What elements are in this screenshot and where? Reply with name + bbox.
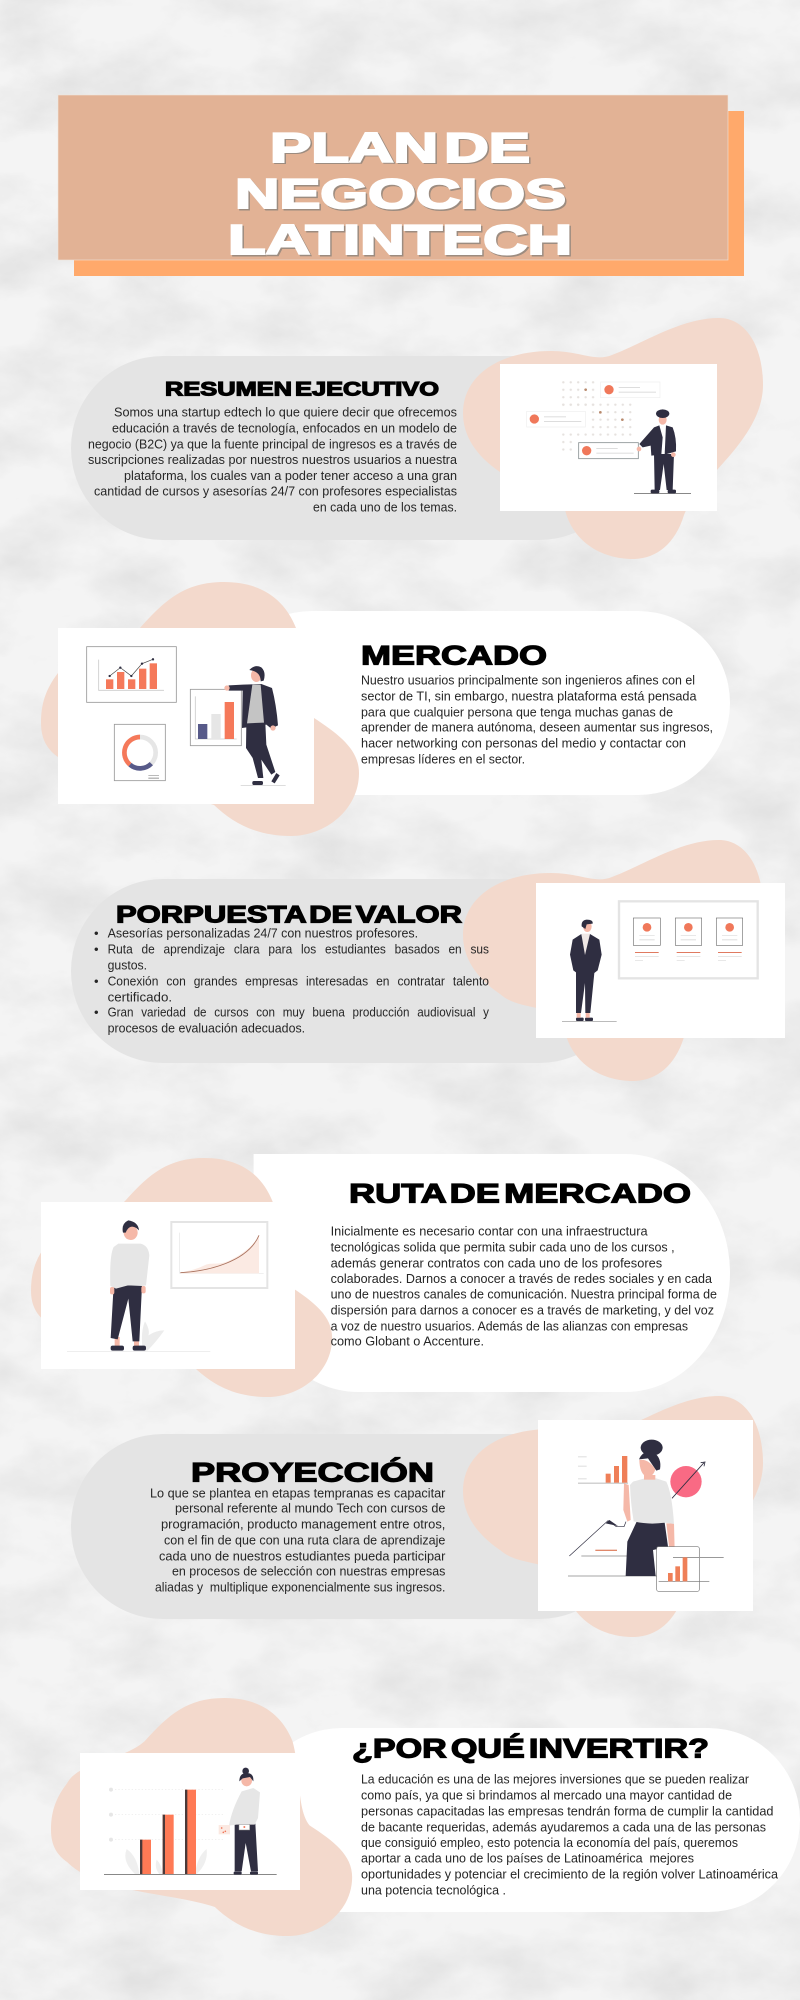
text: proyeccion body: con el fin de que con una ruta clara de aprendizaje <box>164 1532 445 1547</box>
text: proyeccion body <box>150 1486 446 1595</box>
title banner: NEGOCIOS <box>236 172 568 218</box>
text: mercado body: Nuestro usuarios principalmente son ingenieros afines con el <box>361 672 695 687</box>
text: ruta body: como Globant o Accenture. <box>331 1334 484 1349</box>
text: proyeccion body: aliadas y multiplique exponencialmente sus ingresos. <box>155 1580 445 1595</box>
title banner <box>58 95 744 276</box>
blob: mercado <box>41 582 359 836</box>
blob: invertir <box>51 1698 352 1936</box>
illustration: man with board <box>536 883 785 1038</box>
blob: ruta <box>31 1158 332 1397</box>
text: ruta body: uno de nuestros canales de comunicación. Nuestra principal forma de <box>331 1287 717 1302</box>
text: mercado body: para que cualquier persona que tenga muchas ganas de <box>361 705 673 720</box>
text: invertir body: La educación es una de las mejores inversiones que se pueden realizar <box>361 1772 750 1787</box>
text: resumen body: negocio (B2C) ya que la fuente principal de ingresos es a través de <box>88 436 457 451</box>
text: invertir body: como país, ya que si brindamos al mercado una mayor cantidad de <box>361 1788 732 1803</box>
text: resumen body: suscripciones realizadas por nuestros nuestros usuarios a nuestra <box>88 452 458 467</box>
illustration: woman with charts <box>538 1420 753 1611</box>
text: ruta body: colaborades. Darnos a conocer a través de redes sociales y en cada <box>331 1271 713 1286</box>
list: propuesta bullets: • <box>94 941 99 956</box>
text: invertir body: de bacante requeridas, además ayudaremos a cada una de las personas <box>361 1820 766 1835</box>
text: ruta body: Inicialmente es necesario contar con una infraestructura <box>331 1223 648 1238</box>
text: proyeccion body: Lo que se plantea en etapas tempranas es capacitar <box>150 1486 446 1501</box>
text: ruta body: dispersión para darnos a conocer es a través de marketing, y del voz <box>331 1303 714 1318</box>
text: proyeccion body: en procesos de selección con nuestras empresas <box>172 1564 446 1579</box>
text: invertir body: personas capacitadas las empresas tendrán forma de cumplir la cantidad <box>361 1804 774 1819</box>
illustration: man with growth chart <box>41 1202 295 1369</box>
panel: proyeccion <box>71 1396 763 1637</box>
text: proyeccion body: programación, producto management entre otros, <box>161 1516 445 1531</box>
list: propuesta bullets: certificado. <box>108 989 172 1004</box>
blob: resumen <box>463 318 763 559</box>
list: propuesta bullets: Asesorías personalizadas 24/7 con nuestros profesores. <box>108 925 418 940</box>
panel: propuesta de valor <box>71 840 785 1081</box>
list: propuesta bullets: procesos de evaluación adecuados. <box>108 1020 305 1035</box>
text: invertir body: aportar a cada uno de los países de Latinoamérica mejores <box>361 1851 694 1866</box>
panel: por que invertir <box>51 1698 800 1936</box>
text: resumen body: cantidad de cursos y asesorías 24/7 con profesores especialistas <box>94 484 457 499</box>
title banner: LATINTECH <box>230 218 574 264</box>
list: propuesta bullets: • <box>94 925 99 940</box>
text: proyeccion body: cada uno de nuestros estudiantes pueda participar <box>159 1548 446 1563</box>
heading: proyeccion: PROYECCIÓN <box>191 1457 434 1488</box>
list: propuesta bullets: Gran variedad de cursos con muy buena producción audiovisual y <box>108 1005 489 1020</box>
heading: mercado: MERCADO <box>361 640 547 670</box>
text: resumen body <box>88 405 458 515</box>
blob: proyeccion <box>463 1396 763 1637</box>
text: ruta body: tecnológicas solida que permita subir cada uno de los cursos , <box>331 1240 675 1255</box>
text: invertir body: una potencia tecnológica . <box>361 1883 506 1898</box>
heading: resumen ejecutivo: RESUMEN EJECUTIVO <box>165 379 439 401</box>
text: invertir body <box>361 1772 779 1898</box>
panel: resumen ejecutivo <box>71 318 763 559</box>
list: propuesta bullets <box>94 925 489 1035</box>
panel: ruta de mercado <box>31 1154 730 1397</box>
heading: ruta de mercado: RUTA DE MERCADO <box>349 1179 691 1209</box>
illustration: woman with bar chart <box>80 1753 300 1890</box>
title text: LATINTECH <box>228 216 572 263</box>
text: resumen body: Somos una startup edtech lo que quiere decir que ofrecemos <box>114 405 457 420</box>
blob: propuesta <box>463 840 763 1081</box>
heading: porpuesta de valor: PORPUESTA DE VALOR <box>116 903 462 929</box>
text: mercado body: sector de TI, sin embargo, nuestra plataforma está pensada <box>361 689 697 704</box>
title banner: PLAN DE <box>272 125 532 172</box>
illustration: man with charts <box>58 628 314 804</box>
text: proyeccion body: personal referente al mundo Tech con cursos de <box>175 1501 445 1516</box>
list: propuesta bullets: gustos. <box>108 957 147 972</box>
title text: NEGOCIOS <box>235 170 566 217</box>
text: mercado body: aprender de manera autónoma, deseen aumentar sus ingresos, <box>361 720 713 735</box>
list: propuesta bullets: Conexión con grandes empresas interesadas en contratar talento <box>108 973 489 988</box>
text: mercado body: empresas líderes en el sector. <box>361 751 525 766</box>
text: mercado body: hacer networking con personas del medio y contactar con <box>361 736 686 751</box>
text: ruta body: a voz de nuestro usuarios. Además de las alianzas con empresas <box>331 1319 688 1334</box>
text: ruta body: además generar contratos con cada uno de los profesores <box>331 1256 663 1271</box>
list: propuesta bullets: • <box>94 973 99 988</box>
text: resumen body: en cada uno de los temas. <box>313 500 457 515</box>
text: invertir body: oportunidades y potenciar el crecimiento de la región volver Latinoamérica <box>361 1867 779 1882</box>
text: mercado body <box>361 672 713 766</box>
list: propuesta bullets: • <box>94 1005 99 1020</box>
title text <box>228 124 572 263</box>
illustration: man with cards <box>500 364 717 511</box>
panel: mercado <box>41 582 730 836</box>
text: invertir body: que consiguió empleo, esto potencia la economía del país, queremos <box>361 1835 738 1850</box>
text: ruta body <box>331 1223 717 1349</box>
title text: PLAN DE <box>270 124 530 171</box>
heading: por que invertir: ¿POR QUÉ INVERTIR? <box>352 1733 709 1764</box>
text: resumen body: plataforma, los cuales van a poder tener acceso a una gran <box>124 468 457 483</box>
text: resumen body: educación a través de tecnología, enfocados en un modelo de <box>112 420 457 436</box>
list: propuesta bullets: Ruta de aprendizaje clara para los estudiantes basados en sus <box>108 941 489 956</box>
